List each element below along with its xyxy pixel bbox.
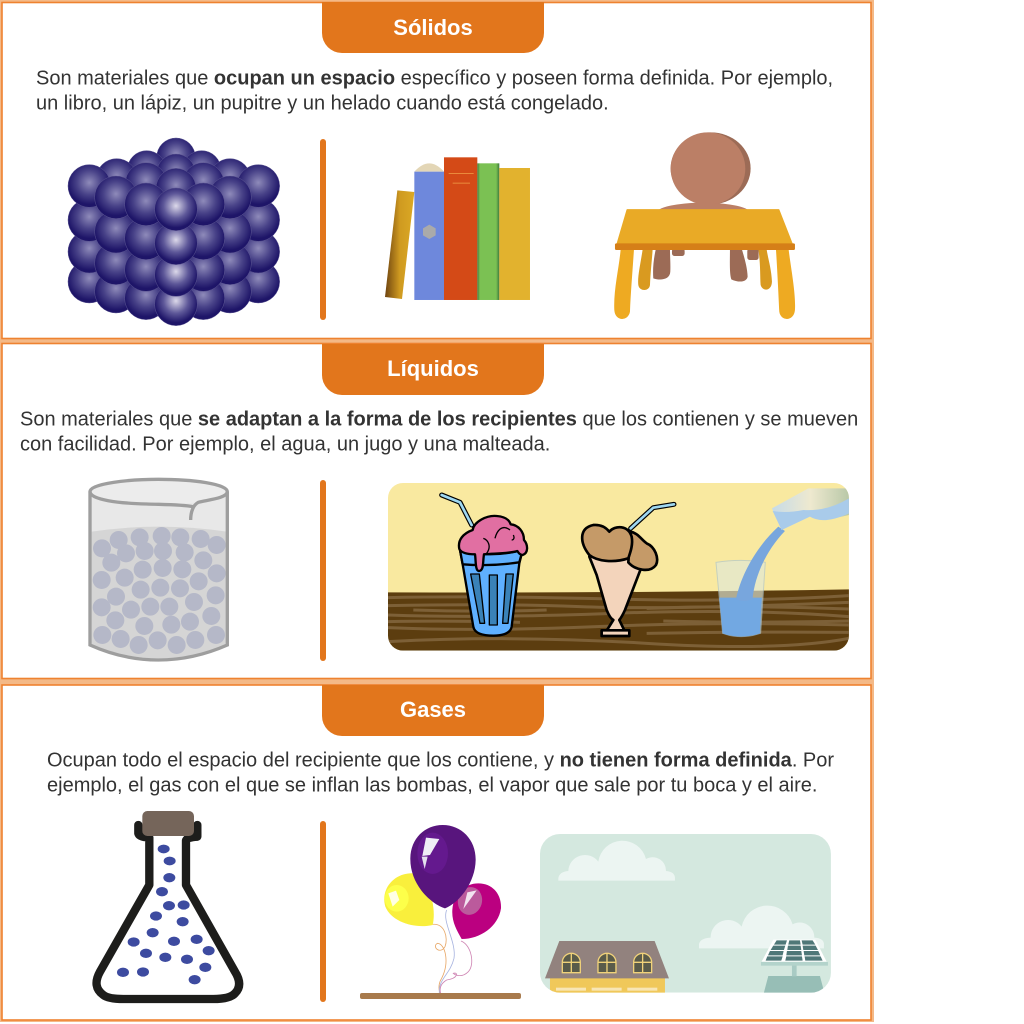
text block: definición de líquidos: Son materiales que xyxy=(20,408,198,430)
illustration: drinks on table xyxy=(388,483,849,651)
icon: flask with gas particles xyxy=(97,811,239,999)
milkshake: chocolate xyxy=(582,504,674,636)
icon: sphere lattice xyxy=(68,138,280,326)
divider bar xyxy=(320,821,326,1002)
text block: definición de gases: Ocupan todo el espacio del recipiente que los contiene, y xyxy=(47,750,560,772)
water glass and bottle xyxy=(716,488,849,637)
milkshake: pink xyxy=(442,495,527,636)
illustration: sky with house and solar panel xyxy=(540,834,831,995)
text block: definición de sólidos: un libro, un lápiz, un pupitre y un helado cuando está congelado. xyxy=(36,92,609,114)
solar panel xyxy=(761,940,828,995)
text block: definición de líquidos: se adaptan a la forma de los recipientes que los contienen y se mueven xyxy=(198,408,858,430)
heading tab: Gases: Gases xyxy=(400,697,466,722)
icon: beaker with particles xyxy=(90,479,227,660)
panel: gases xyxy=(2,685,871,1020)
panel: sólidos xyxy=(2,2,871,338)
house xyxy=(545,941,669,994)
heading tab: Líquidos: Líquidos xyxy=(387,356,479,381)
text block: definición de sólidos: ocupan un espacio específico y poseen forma definida. Por ejemplo, xyxy=(214,68,833,90)
icon: school desk xyxy=(614,132,795,319)
illustration: balloons xyxy=(360,825,521,999)
divider bar xyxy=(320,139,326,320)
clouds xyxy=(558,841,824,948)
text block: definición de sólidos: Son materiales que xyxy=(36,68,214,90)
heading tab: Sólidos: Sólidos xyxy=(393,15,473,40)
heading tab: Gases xyxy=(322,685,544,736)
icon: books xyxy=(385,157,530,300)
heading tab: Sólidos xyxy=(322,2,544,53)
text block: definición de gases: no tienen forma definida. Por xyxy=(560,750,834,772)
panel: líquidos xyxy=(2,344,871,678)
heading tab: Líquidos xyxy=(322,344,544,395)
text block: definición de líquidos: con facilidad. Por ejemplo, el agua, un jugo y una malteada. xyxy=(20,434,550,456)
text block: definición de gases: ejemplo, el gas con el que se inflan las bombas, el vapor que sale por tu boca y el aire. xyxy=(47,774,817,796)
divider bar xyxy=(320,480,326,661)
